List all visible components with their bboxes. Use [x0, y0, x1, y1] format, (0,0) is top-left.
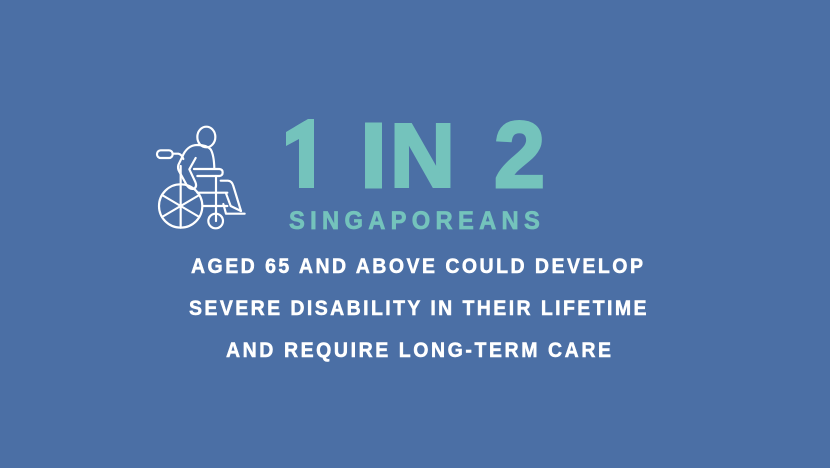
body text: SEVERE DISABILITY IN THEIR LIFETIME [189, 297, 647, 320]
icon: person in wheelchair [157, 127, 245, 228]
headline: 1 IN 2: N [390, 106, 455, 206]
headline: 1 IN 2: 1 [283, 100, 327, 212]
body text: AGED 65 AND ABOVE COULD DEVELOP [191, 255, 643, 278]
headline: 1 IN 2: 2 [494, 102, 545, 207]
body text: AND REQUIRE LONG-TERM CARE [226, 339, 611, 362]
headline: 1 IN 2: I [361, 106, 386, 206]
subheading: Singaporeans: SINGAPOREANS [289, 207, 540, 235]
body text [189, 255, 647, 362]
headline: 1 IN 2 [286, 119, 543, 188]
